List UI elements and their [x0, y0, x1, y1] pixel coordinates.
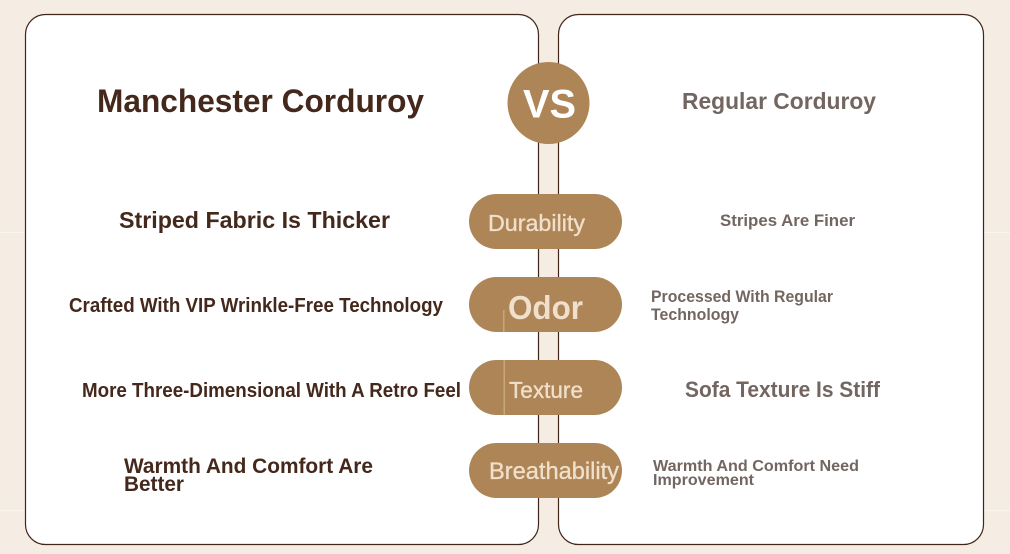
- right text: [651, 288, 834, 324]
- row: Odor: [69, 277, 834, 332]
- right text: Processed With Regular: [651, 288, 834, 306]
- pill: Odor: Odor: [508, 289, 583, 326]
- right text: Warmth And Comfort Need: [653, 458, 859, 475]
- pill: Durability: [469, 194, 622, 249]
- left text: Warmth And Comfort Are: [124, 454, 373, 478]
- right text: Improvement: [653, 472, 755, 489]
- right text: Technology: [651, 306, 740, 324]
- right text: Stripes Are Finer: [720, 211, 855, 230]
- heading: Manchester Corduroy: Manchester Corduroy: [97, 83, 424, 119]
- pill: Texture: Texture: [509, 377, 583, 403]
- left text: More Three-Dimensional With A Retro Feel: [82, 380, 461, 402]
- pill: Breathability: Breathability: [489, 458, 619, 485]
- row: Breathability: [124, 443, 859, 498]
- left text: Crafted With VIP Wrinkle-Free Technology: [69, 295, 444, 317]
- heading: Regular Corduroy: Regular Corduroy: [682, 88, 876, 114]
- pill: Breathability: [469, 443, 622, 498]
- row: Durability: [119, 194, 855, 249]
- pill: Odor: [469, 277, 622, 332]
- row: Texture: [82, 360, 880, 415]
- left text: [124, 454, 373, 496]
- right text: Sofa Texture Is Stiff: [685, 377, 880, 402]
- right text: [653, 458, 859, 489]
- left text: Better: [124, 472, 185, 496]
- left text: Striped Fabric Is Thicker: [119, 207, 390, 233]
- VS badge: [508, 62, 590, 144]
- pill: Texture: [469, 360, 622, 415]
- VS badge: VS: [523, 82, 576, 126]
- pill: Durability: Durability: [488, 210, 585, 236]
